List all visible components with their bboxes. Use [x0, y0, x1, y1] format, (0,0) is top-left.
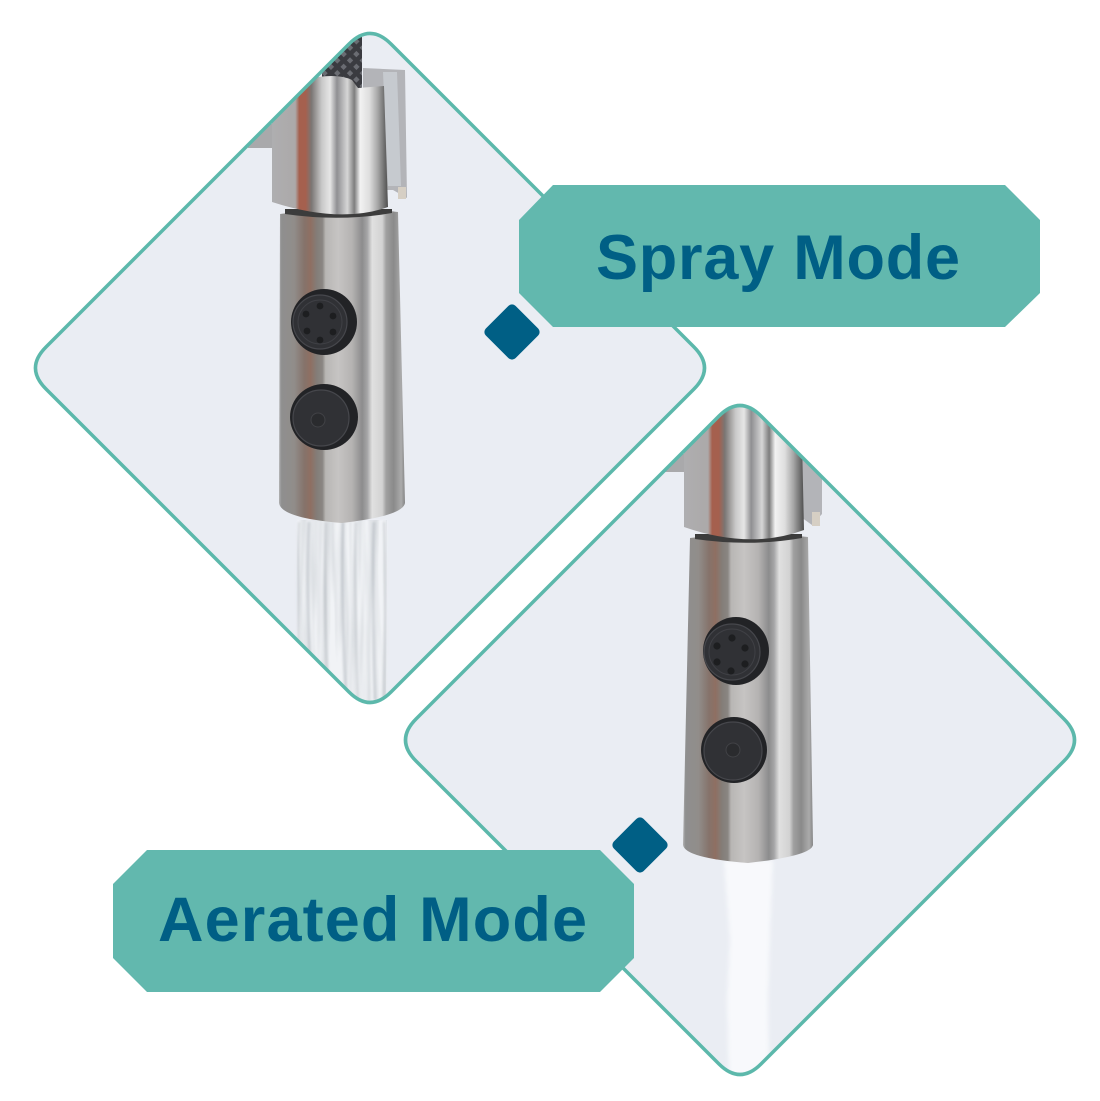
faucet head: aerated	[664, 395, 822, 1075]
ring	[695, 534, 802, 543]
left bracket	[666, 454, 684, 472]
left bracket	[248, 124, 272, 148]
ring	[285, 209, 392, 218]
upper collar	[272, 76, 388, 214]
cylinder body	[683, 534, 813, 863]
cylinder body	[279, 209, 405, 523]
panel: aerated mode photo	[406, 395, 1074, 1075]
label: spray mode: Spray Mode	[596, 223, 960, 293]
water spray streaks	[297, 520, 387, 705]
panel: spray mode photo	[36, 30, 704, 705]
button: spray	[703, 617, 769, 685]
upper collar	[684, 395, 804, 539]
button: aerated	[701, 717, 767, 783]
diamond outline	[36, 34, 704, 702]
aerated water stream	[724, 860, 773, 1075]
marker: spray mode	[482, 302, 542, 362]
right bracket	[363, 68, 407, 198]
button: spray	[291, 289, 357, 355]
braided hose	[322, 37, 362, 88]
diamond background	[406, 406, 1074, 1074]
label: aerated mode: Aerated Mode	[158, 885, 587, 955]
diamond outline	[406, 406, 1074, 1074]
label: aerated mode	[113, 850, 634, 992]
button: aerated	[290, 384, 358, 450]
marker: aerated mode	[610, 815, 670, 875]
faucet head: spray	[248, 30, 407, 705]
label: spray mode	[519, 185, 1040, 327]
right bracket	[802, 460, 822, 525]
diamond background	[36, 34, 704, 702]
